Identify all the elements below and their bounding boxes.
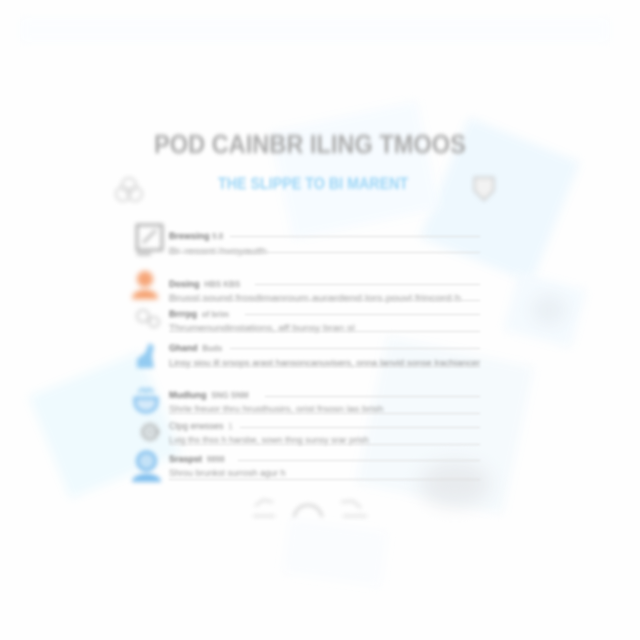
background shape: upper right panel (420, 117, 580, 283)
row 3 (134, 308, 479, 334)
heading: Dosing HBS KBS (169, 279, 240, 289)
icon: blue flask (134, 341, 156, 372)
icon: orange person (128, 267, 162, 304)
text: Lvig ths thss h harsbe, sown thng sunsy srar prish (169, 435, 369, 445)
icon: right shield (472, 174, 496, 202)
heading: Ctpg erwsses 1 (169, 421, 233, 431)
background shape: lower left panel (29, 352, 181, 498)
icon: blue user (130, 448, 164, 486)
background shape: top centre panel (270, 101, 440, 239)
heading: Ghand Buds (169, 343, 222, 353)
text: Brussl sound frosdimanroum aurardend lors pouvl frincord h (169, 293, 461, 303)
row 1 (133, 221, 479, 258)
heading: Sraspst 9898 (169, 454, 225, 464)
text: Shrle freuor thru hrusthusirs, orist frsosn las brish (169, 404, 383, 414)
title: POD CAINBR ILING TMOOS (154, 129, 466, 159)
icon: linked rings (134, 308, 162, 330)
icon: left arrow stand (254, 498, 274, 518)
icon: blue cup (130, 386, 162, 416)
heading: Brewsing 9.8 (169, 231, 223, 241)
icon: gear (139, 421, 162, 443)
heading: Mudlung SNG SNM (169, 390, 249, 400)
icon: framed chart (133, 221, 166, 258)
background shape: lower right panel (356, 336, 534, 514)
decorative smudge: right (532, 295, 566, 325)
row 4 (134, 341, 481, 372)
text: Linsy siou ill srsops arast hansoncanuvisers, onna lanvid sonse lrachiancer (169, 358, 480, 368)
row 6 (139, 421, 479, 446)
decorative smudge: lower right (420, 462, 490, 506)
icon: right arrow stand (342, 499, 366, 518)
bottom icons (254, 498, 366, 518)
text: Thrumenundinstations, aff bunsy bran sl (169, 323, 355, 333)
heading: Brrrpg of brim (169, 309, 229, 319)
icon: centre arc (292, 502, 324, 518)
row 2 (128, 267, 479, 304)
subtitle: THE SLIPPE TO BI MARENT (218, 174, 408, 193)
icon: left badge (114, 176, 144, 203)
text: Shrou brunkst surrosh agur h (169, 468, 286, 478)
row 5 (130, 386, 479, 416)
text: Br ressnt hvoyauth (169, 246, 267, 256)
row 7 (130, 448, 479, 486)
background shape: top band (20, 18, 610, 42)
background shape: lower centre panel (282, 518, 388, 587)
background shape: right panel (503, 272, 587, 348)
